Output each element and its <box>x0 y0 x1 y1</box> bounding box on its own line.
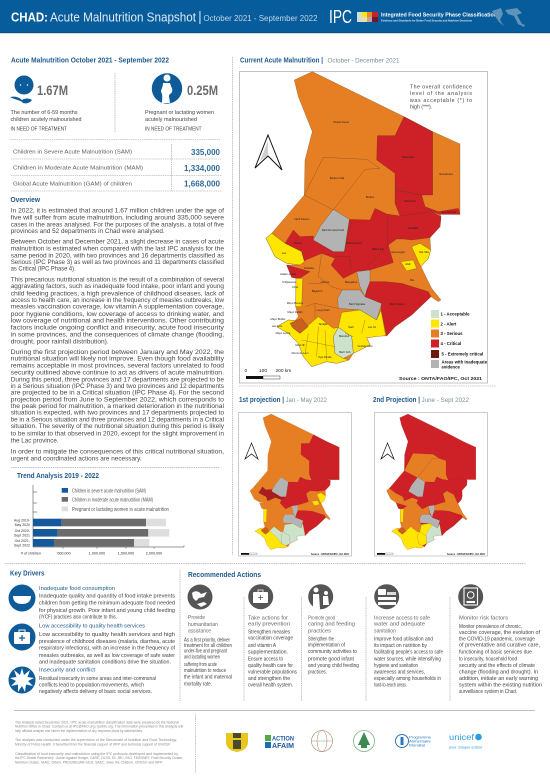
heading: current map <box>240 58 400 64</box>
footer notes: help officials analyse and inform the implementation of any response plans by stakeholders. <box>15 729 143 733</box>
map legend <box>431 310 488 370</box>
header banner: Evidence and Standards for Better Food Security and Nutrition Decisions <box>381 19 472 23</box>
action: caring and feeding: Promote good <box>308 615 335 621</box>
icon: child <box>10 76 34 103</box>
map labels: Mayo Binder <box>270 317 286 321</box>
logo: coat of arms <box>226 733 248 752</box>
action: water and sanitation: its impact on nutrition by <box>374 643 427 649</box>
action: water and sanitation: especially among households in <box>374 676 441 682</box>
text block: overview: Between October and December 2021, a slight decrease in cases of acute <box>11 239 224 246</box>
action: humanitarian assistance: the infant and maternal <box>184 675 232 681</box>
logo: action contre la faim: AFAIM <box>272 743 294 750</box>
text block: overview: the Lac province. <box>11 437 59 444</box>
confidence note: level of the analysis <box>410 91 472 97</box>
heading: acute malnutrition: Acute Malnutrition October 2021 - September 2022 <box>11 58 169 64</box>
heading: key drivers: Key Drivers <box>10 570 45 578</box>
action: monitor risk factors: of preventative and curative care, <box>459 643 540 649</box>
action: caring and feeding: and young child feeding <box>308 663 359 669</box>
map legend: evidence <box>442 364 461 370</box>
icon: pregnant woman <box>152 73 182 104</box>
text block: overview: This precarious nutritional situation is the result of a combination of several <box>11 276 225 283</box>
chart legend: Pregnant or lactating women in acute malnutrition <box>72 507 169 513</box>
map labels: Ouaddai <box>408 226 418 230</box>
action: early prevention: vulnerable populations <box>248 670 297 676</box>
action: monitor risk factors: to insecurity, household food <box>459 657 517 663</box>
icon: monitoring document <box>458 584 483 609</box>
footer notes: Nutrition Cluster, IGAD, Oxfam, PROGRESAN-SICA, SADC, Save the Children, UNICEF and WFP. <box>15 761 163 765</box>
action: caring and feeding: community activities to <box>308 649 357 655</box>
text block: overview: be in a Serious situation and three provinces and 12 departments in a Critical <box>11 416 224 423</box>
map labels: Bahr Azoum <box>390 302 405 306</box>
action: monitor risk factors: addition, initiate an early warning <box>459 676 538 682</box>
map labels: Batha Ouest <box>347 241 362 245</box>
action: humanitarian assistance: and lactating women <box>184 655 220 661</box>
map scale: 0 <box>244 368 248 374</box>
table: malnutrition figures: 1,334,000 <box>184 164 221 173</box>
action: monitor risk factors: vaccine coverage, the evolution of <box>459 630 541 636</box>
action: water and sanitation: awareness and services, <box>374 670 425 676</box>
map labels: Borkou Yala <box>330 176 345 180</box>
map labels: Abdi <box>405 262 411 266</box>
heading: current map: Current Acute Malnutrition | <box>240 58 323 64</box>
text block: overview: as Critical (IPC Phase 4). <box>11 266 76 273</box>
action: water and sanitation: water sources, while intensifying <box>374 656 441 662</box>
logo: action contre la faim <box>265 735 294 750</box>
driver: low access to health services: prevalence of childhood diseases (malaria, diarrhea, acute <box>39 639 175 645</box>
action: early prevention: vaccination coverage <box>248 636 293 642</box>
bar chart: trend analysis: # of children <box>21 552 41 556</box>
text block: overview: During this period, three provinces and 17 departments are projected to be <box>11 376 224 383</box>
action: water and sanitation: Improve food utilisation and <box>374 636 433 642</box>
driver: insecurity and conflict: Insecurity and conflict <box>39 668 95 674</box>
header banner <box>0 0 550 33</box>
map labels: Hadjer-Lamis <box>280 272 297 276</box>
driver: low access to health services: and inadequate sanitation conditions drive the situation. <box>39 660 171 666</box>
text: women in need: IN NEED OF TREATMENT <box>145 126 202 132</box>
logo: unicef: unicef <box>449 732 475 742</box>
driver: inadequate food consumption: (IYCF) practices also contribute to this. <box>39 615 117 621</box>
logo: action contre la faim: ACTION <box>272 736 294 742</box>
action: monitor risk factors: Monitor risk factors <box>459 615 508 621</box>
table: malnutrition figures: Global Acute Malnutrition (GAM) of children <box>13 182 132 188</box>
table: malnutrition figures: Children in Moderate Acute Malnutrition (MAM) <box>13 166 143 172</box>
icon: medical kit <box>8 624 36 650</box>
driver: low access to health services: respiratory infections), with an increase in the frequency of <box>39 646 175 652</box>
action: humanitarian assistance: assistance <box>188 629 211 635</box>
action: humanitarian assistance: malnutrition to reduce <box>184 668 226 674</box>
action: water and sanitation: water and adequate <box>373 621 425 627</box>
action: water and sanitation: sanitation <box>374 628 396 634</box>
icon: hands <box>188 584 212 610</box>
map labels: Dababa <box>304 266 314 270</box>
heading: current map: October - December 2021 <box>328 58 400 64</box>
action: caring and feeding: implementation of <box>308 642 345 648</box>
driver: low access to health services: Low accessibility to quality health services <box>39 624 145 630</box>
logo: green seal <box>354 730 374 752</box>
action: caring and feeding: caring and feeding <box>308 621 355 627</box>
action: early prevention: early prevention <box>248 621 290 627</box>
text: women in need: acutely malnourished <box>145 117 197 123</box>
action: monitor risk factors: functioning of basic services due <box>459 650 532 656</box>
text block: overview: in some provinces, and the consequences of climate change (flooding, <box>11 332 224 339</box>
header banner: Acute Malnutrition Snapshot <box>50 10 196 24</box>
text block: overview: low coverage of nutritional and health interventions. Other contributing <box>11 318 224 325</box>
text: children in need: The number of 6-59 months <box>10 110 78 116</box>
action: caring and feeding <box>308 584 359 676</box>
map scale: 200 km <box>276 368 291 374</box>
logo: WFP: Programme <box>409 736 431 740</box>
action: humanitarian assistance <box>184 584 232 687</box>
source: Source : ONTA/FAO/IPC, Oct 2021 <box>447 552 485 556</box>
text block: overview: situation is expected, with two provinces and 17 departments projected to <box>11 410 224 417</box>
text block: overview: In order to mitigate the consequences of this critical nutritional situation, <box>11 449 224 456</box>
footer notes: Ministry of Public Health. It benefited from the financial support of WFP and technical support of UNICEF. <box>15 742 171 746</box>
text block: overview: cases in the areas analysed. For the purposes of the analysis, a total of five <box>11 221 224 228</box>
map labels: Mayo Dallah <box>288 310 303 314</box>
heading: first projection: Jan - May 2022 <box>286 397 327 404</box>
map labels: Wadi Fira <box>404 199 416 203</box>
action: caring and feeding: promote good infant <box>308 656 355 662</box>
text block: overview: aggravating factors, such as inadequate food intake, poor infant and young <box>11 283 224 290</box>
icon: water containers <box>374 584 399 609</box>
map labels: Tibesti Est <box>402 155 414 159</box>
map labels: Batha Est <box>372 247 384 251</box>
bar chart: trend analysis: 1,500,000 <box>118 552 134 556</box>
map labels: Baguirmi <box>312 289 323 293</box>
table: malnutrition figures: Children in Severe Acute Malnutrition (SAM) <box>13 150 132 156</box>
heading: overview: Overview <box>10 197 41 204</box>
map legend: 3 - Serious <box>440 331 463 336</box>
map labels: N'Djamena <box>282 280 296 284</box>
action: humanitarian assistance: mortality rate. <box>184 681 212 687</box>
text block: overview: to be similar to that observed in 2020, except for the slight improvement in <box>11 430 224 437</box>
action: early prevention: Take actions for <box>248 615 288 621</box>
action: early prevention: supplementation. <box>248 650 288 656</box>
text: children in need <box>10 110 82 132</box>
driver: inadequate food consumption: Inadequate food consumption <box>39 586 115 592</box>
map labels: Lac Iro <box>368 325 377 329</box>
map labels: Barh El Gazal Sud <box>322 228 345 232</box>
action: monitor risk factors: the COVID-19 pandemic, coverage <box>459 637 535 643</box>
text block: overview: five will suffer from acute malnutrition, including around 335,000 severe <box>11 214 224 222</box>
action: early prevention: and strengthen the <box>248 676 290 682</box>
heading: first projection <box>239 397 327 404</box>
map labels: Lac Lere <box>272 324 283 328</box>
stat: 1.67M: 1.67M <box>37 82 68 98</box>
footer notes: The analysis was conducted under the supervision of the Directorate of Nutrition and Food Technology, <box>15 738 177 742</box>
bar chart: trend analysis: 2,000,000 <box>146 552 162 556</box>
icon: kit <box>248 584 273 609</box>
bar chart: trend analysis: 500,000 <box>57 552 71 556</box>
text: children in need: children acutely malnourished <box>10 117 82 123</box>
logo: WFP <box>396 734 431 748</box>
text block: overview: nutritional situation will likely not improve. Even though food availability <box>11 356 225 363</box>
panel: current acute malnutrition map <box>240 72 488 383</box>
map labels: Monts de Lam <box>291 351 309 355</box>
action: early prevention: and vitamin A <box>248 643 276 649</box>
table: malnutrition figures <box>11 144 222 191</box>
footer notes: the IPC Global Partnership - Action Against Hunger, CARE, CILSS, EC JRC, FAO, FEWSNET, Food Security Cluster, <box>15 756 183 760</box>
bar chart: trend analysis <box>14 485 184 556</box>
map labels: Lac <box>282 251 287 255</box>
text block: overview: security outlined above continue to act as drivers of acute malnutrition. <box>11 369 224 376</box>
map labels: Kanem <box>294 241 303 245</box>
driver: inadequate food consumption <box>8 584 175 621</box>
driver: low access to health services: Low accessibility to quality health services and high <box>39 632 175 638</box>
action: humanitarian assistance: humanitarian <box>188 622 218 628</box>
text block: overview: access to health care, an increase in the frequency of measles outbreaks, low <box>11 297 224 304</box>
action: caring and feeding: practices <box>308 628 331 634</box>
confidence note: was acceptable (*) to <box>410 98 472 104</box>
bar chart: trend analysis: Sept 2021 <box>14 533 30 537</box>
map labels: Ennedi Sud <box>442 210 456 214</box>
map labels: Mangalme <box>345 280 358 284</box>
driver: inadequate food consumption: Inadequate quality and quantity of food intake prevents <box>39 594 175 600</box>
map legend: 5 - Extremely critical <box>442 352 483 356</box>
header banner: October 2021 - September 2022 <box>204 14 318 23</box>
text: children in need: IN NEED OF TREATMENT <box>10 126 67 132</box>
text block: overview: are projected to be in a Critical situation (IPC Phase 4). For the second <box>11 390 224 397</box>
icon: north arrow <box>245 443 258 459</box>
text block: overview: In 2022, it is estimated that around 1.67 million children under the age of <box>11 208 224 215</box>
text: women in need: Pregnant or lactating women <box>145 110 214 116</box>
text block: overview: During the first projection period between January and May 2022, the <box>11 349 224 356</box>
map scale: 100 <box>259 368 267 374</box>
driver: insecurity and conflict: conflicts lead to population movements, which <box>39 682 144 688</box>
map labels: Chari <box>292 285 299 289</box>
map labels: Mont Illi <box>295 343 305 347</box>
map labels: Nya Pende <box>318 355 332 359</box>
logo: WFP: Mondial <box>409 744 425 748</box>
text block: overview: provinces and 52 departments in Chad were analysed. <box>11 228 165 235</box>
text block: overview: situation. The severity of the nutritional situation during this period is likely <box>11 423 225 430</box>
chart legend <box>62 488 169 513</box>
bar chart: trend analysis: 1,000,000 <box>89 552 105 556</box>
action: humanitarian assistance: As a first priority, deliver <box>184 637 230 643</box>
map labels: Barh Koh <box>339 350 351 354</box>
text block: overview: remains acceptable in most provinces, several factors unrelated to food <box>11 362 224 369</box>
map labels: Ennedi Est <box>440 172 453 176</box>
action: caring and feeding: Strengthen the <box>308 636 334 642</box>
map labels: Borkou <box>366 195 375 199</box>
heading: second projection: 2nd Projection | <box>373 397 420 404</box>
icon: north arrow <box>381 443 394 459</box>
panel: second projection map <box>374 412 488 556</box>
action: humanitarian assistance: treatment for all children <box>184 643 232 649</box>
action: monitor risk factors: security and the effects of climate <box>459 663 535 669</box>
action: early prevention: Ensure access to <box>248 656 283 662</box>
map legend: 1 - Acceptable <box>440 312 470 316</box>
action: humanitarian assistance: under-five and pregnant <box>184 649 227 655</box>
heading: second projection <box>373 397 469 404</box>
text block: overview: malnutrition is estimated when compared with the last IPC analysis for the <box>11 245 224 252</box>
map labels: Barh Signaka <box>349 302 366 306</box>
chart legend: Children in severe acute malnutrition (SAM) <box>72 488 146 494</box>
map labels: Assoungha <box>391 250 405 254</box>
map: Chad regions current <box>266 72 460 367</box>
text block: overview: factors include ongoing conflict and insecurity, acute food insecurity <box>11 324 225 331</box>
action: monitor risk factors <box>458 584 542 695</box>
logo: WFP: Alimentaire <box>409 740 431 744</box>
footer notes: Classification of food insecurity and malnutrition using the IPC protocols developed and implemented by <box>15 752 178 756</box>
map labels: Nord Kanem <box>294 217 310 221</box>
map labels <box>270 120 456 359</box>
text block: overview: Serious (IPC Phase 3) as well as two provinces and 11 departments classified <box>11 259 224 266</box>
action: water and sanitation: facilitating people's access to safe <box>374 650 443 656</box>
action: early prevention: quality health care for <box>248 663 293 669</box>
map scale <box>244 368 291 379</box>
stat: 0.25M: 0.25M <box>187 82 218 98</box>
footer notes: The Analysis dated December 2021 / IPC acute malnutrition classification data were prepared by the National <box>15 720 179 724</box>
text block: overview <box>11 208 225 462</box>
table: malnutrition figures: 335,000 <box>191 148 221 157</box>
driver: low access to health services <box>8 624 175 666</box>
text block: overview: projection period from June to September 2022, which corresponds to <box>11 396 224 403</box>
scale <box>377 553 393 555</box>
action: water and sanitation: Increase access to safe <box>374 615 430 621</box>
map source: Source : ONTA/FAO/IPC, Oct 2021 <box>399 376 482 381</box>
icon: north arrow <box>255 135 282 170</box>
action: water and sanitation <box>373 584 443 688</box>
text block: overview: measles vaccination coverage, low vitamin A supplementation coverage, <box>11 304 224 311</box>
driver: inadequate food consumption: children from getting the minimum adequate food needed <box>39 601 175 607</box>
driver: insecurity and conflict: Residual insecurity in some areas and inter-communal <box>39 676 156 682</box>
heading: trend analysis: Trend Analysis 2019 - 2022 <box>17 473 99 480</box>
map legend: 4 - Critical <box>440 341 461 346</box>
bar chart: trend analysis: Sept 2022 <box>14 543 30 547</box>
bar chart: trend analysis: Aug 2019- <box>14 518 31 522</box>
header banner: IPC <box>329 7 352 27</box>
icon: bowl <box>8 584 36 612</box>
text block: overview: poor hygiene conditions, low coverage of access to drinking water, and <box>11 311 224 318</box>
chart legend: Children in moderate acute malnutrition (MAM) <box>72 497 153 503</box>
footer notes <box>15 720 183 765</box>
text block: overview: in a Serious situation (IPC Phase 3) and two provinces and 12 departments <box>11 383 225 390</box>
footer notes: Nutrition Office in Chad. Contact us at IPC@FAO.org | ipcinfo.org. The information presented in this analysis will <box>15 725 183 729</box>
text block: overview: child feeding practices, a high prevalence of childhood diseases, lack of <box>11 290 224 297</box>
map labels: Haraze <box>321 280 330 284</box>
map labels: Mayo Boneye <box>287 301 304 305</box>
table: malnutrition figures: 1,668,000 <box>184 180 221 188</box>
confidence note <box>410 84 472 110</box>
map labels: Sila <box>410 278 415 282</box>
logo: unicef: pour chaque enfant <box>449 746 482 750</box>
map legend: Areas with inadequate <box>442 360 488 364</box>
map labels: Loug Chari <box>316 308 330 312</box>
action: early prevention: Strengthen measles <box>248 630 290 636</box>
text block: overview: same period in 2020, with two provinces and 16 departments classified as <box>11 252 225 259</box>
source: Source : ONTA/FAO/IPC, Oct 2021 <box>311 552 349 556</box>
confidence note: The overall confidence <box>410 84 472 90</box>
map legend: 2 - Alert <box>440 322 457 326</box>
action: monitor risk factors: Monitor prevalence of chronic, <box>459 624 522 630</box>
panel: first projection map <box>238 412 352 556</box>
action: monitor risk factors: system within the existing nutrition <box>459 683 542 689</box>
logo: CILSS <box>312 730 332 752</box>
driver: inadequate food consumption: for physical growth. Poor infant and young child feeding <box>39 608 175 614</box>
driver: low access to health services: measles outbreaks, as well as low coverage of safe water <box>39 653 175 659</box>
heading: first projection: 1st projection | <box>239 397 284 404</box>
action: monitor risk factors: surveillance system in Chad. <box>459 689 517 695</box>
action: humanitarian assistance: Provide <box>188 615 205 621</box>
map labels: Mandoul <box>339 334 350 338</box>
action: monitor risk factors: change (flooding and drought). In <box>459 670 538 676</box>
bar chart: trend analysis: Oct 2020- <box>15 529 31 533</box>
action: caring and feeding: practices. <box>308 670 327 676</box>
action: water and sanitation: hygiene and sanitation <box>374 663 418 669</box>
driver: insecurity and conflict <box>8 666 156 695</box>
heading: recommended actions: Recommended Actions <box>188 572 261 579</box>
map labels: Tibesti Ouest <box>333 120 349 124</box>
driver: insecurity and conflict: negatively affects delivery of basic social services. <box>39 689 152 695</box>
map labels: Mayo Lemie <box>276 331 291 335</box>
logo: unicef <box>449 732 482 750</box>
text: women in need <box>145 110 214 132</box>
bar chart: trend analysis: Oct 2021- <box>15 539 31 543</box>
icon: explosion <box>8 666 36 694</box>
text block: overview: the peak period for malnutrition, a marked deterioration in the nutritional <box>11 403 225 410</box>
text block: overview: drought, poor rainfall distribution). <box>11 338 109 345</box>
action: early prevention <box>248 584 297 688</box>
header banner: Integrated Food Security Phase Classification <box>381 12 498 18</box>
icon: mother and child <box>308 584 333 609</box>
action: water and sanitation: hard-to-reach areas. <box>374 682 407 688</box>
header banner: CHAD: <box>11 10 48 24</box>
map labels: Sarh <box>348 325 354 329</box>
heading: second projection: June - Sept 2022 <box>422 397 469 404</box>
confidence note: high (***). <box>410 104 432 110</box>
action: early prevention: overall health system. <box>248 682 293 688</box>
map labels: Dar Sila <box>419 250 429 254</box>
text block: overview: urgent and coordinated actions are necessary. <box>11 455 142 462</box>
action: humanitarian assistance: suffering from acute <box>184 662 217 668</box>
map labels: Tandjile <box>318 322 328 326</box>
map labels: Grande Sido <box>357 344 373 348</box>
scale <box>241 553 257 555</box>
bar chart: trend analysis: May 2020 <box>15 523 30 527</box>
